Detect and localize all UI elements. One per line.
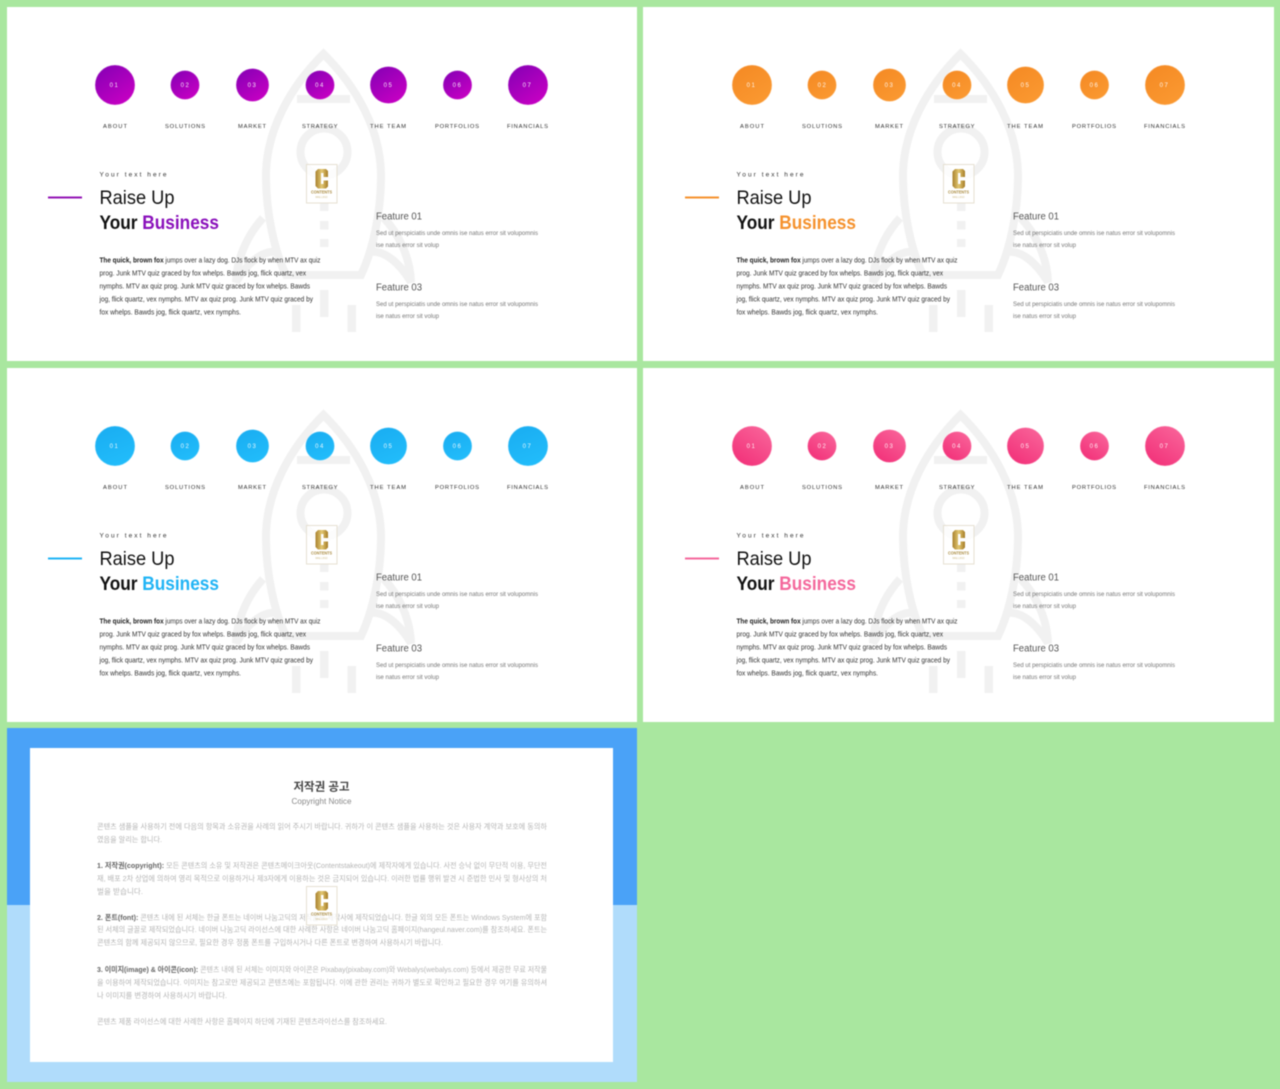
feature 01: [376, 572, 538, 610]
logo: contents: CONTENTS: [311, 912, 332, 916]
body text: nymphs. MTV ax quiz prog. Junk MTV quiz graced by fox whelps. Bawds: [100, 642, 310, 652]
icon: rocket outline: [236, 54, 411, 332]
notice section 2: 2. 폰트(font): 콘텐츠 내에 된 서체는 한글 폰트는 네이버 나눔고딕의 저작물로 제작사에 제작되었습니다. 한글 외의 모든 폰트는 Windows System에 포함: [97, 912, 547, 922]
navigation labels: [740, 124, 1185, 130]
logo: contents: [306, 886, 337, 925]
numbered circles: 07: [523, 83, 532, 89]
feature 03: ise natus error sit volup: [376, 314, 440, 320]
numbered circles: 07: [1160, 444, 1169, 450]
panel: copyright notice: [7, 728, 637, 1082]
navigation labels: ABOUT: [740, 485, 764, 491]
feature 01: ise natus error sit volup: [376, 604, 440, 610]
numbered circles: [95, 426, 548, 466]
numbered circles: 04: [952, 444, 962, 450]
feature 03: [1013, 282, 1175, 320]
feature 01: Feature 01: [1013, 572, 1059, 584]
notice section 1: 벌을 받습니다.: [97, 886, 143, 896]
title: Your Business: [100, 573, 219, 595]
heading accent line: [685, 558, 719, 560]
numbered circles: 03: [248, 444, 257, 450]
logo: contents: CONTENTS: [311, 550, 332, 556]
feature 01: ise natus error sit volup: [1013, 604, 1077, 610]
numbered circles: 06: [1090, 83, 1099, 89]
title: Your Business: [736, 573, 856, 595]
body text: nymphs. MTV ax quiz prog. Junk MTV quiz graced by fox whelps. Bawds: [736, 282, 947, 290]
panel: blue slide: [7, 368, 637, 722]
navigation labels: STRATEGY: [939, 124, 975, 130]
numbered circles: 02: [818, 444, 827, 450]
title: [736, 187, 856, 234]
notice title: [292, 780, 352, 806]
feature 03: Feature 03: [376, 644, 422, 654]
eyebrow text: Your text here: [100, 532, 167, 540]
navigation labels: ABOUT: [740, 124, 764, 130]
navigation labels: [103, 485, 548, 491]
logo: contents: CONTENTS: [948, 190, 969, 194]
numbered circles: 04: [315, 444, 325, 450]
notice intro: [97, 821, 547, 844]
feature 01: Feature 01: [1013, 212, 1059, 222]
body text: [736, 616, 958, 678]
body text: fox whelps. Bawds jog, flick quartz, vex nymphs.: [100, 668, 241, 678]
notice section 2: 콘텐츠의 함께 제공되지 않으므로, 필요한 경우 정품 폰트를 구입하시거나 다른 폰트로 변경하여 사용하시기 바랍니다.: [97, 937, 443, 947]
navigation labels: ABOUT: [103, 124, 127, 130]
body text: [99, 616, 321, 678]
navigation labels: MARKET: [875, 124, 903, 130]
numbered circles: 05: [1021, 444, 1030, 450]
navigation labels: MARKET: [238, 124, 266, 130]
feature 01: Feature 01: [376, 572, 422, 584]
navigation labels: FINANCIALS: [507, 124, 548, 130]
feature 03: Feature 03: [376, 282, 422, 294]
notice section 1: 재, 배포 2차 상업에 의하여 영리 목적으로 이용하거나 제3자에게 이용하는 것은 금지되어 있습니다. 이러한 법률 행위 발견 시 준법한 민사 및 형사상의 처: [97, 873, 547, 883]
body text: nymphs. MTV ax quiz prog. Junk MTV quiz graced by fox whelps. Bawds: [100, 282, 310, 290]
body text: prog. Junk MTV quiz graced by fox whelps. Bawds jog, flick quartz, vex: [100, 630, 306, 638]
numbered circles: 02: [181, 83, 190, 89]
body text: fox whelps. Bawds jog, flick quartz, vex nymphs.: [736, 668, 878, 678]
numbered circles: 03: [248, 83, 257, 89]
numbered circles: 04: [952, 83, 962, 89]
notice intro: 콘텐츠 샘플을 사용하기 전에 다음의 항목과 소유권을 사례의 읽어 주시기 바랍니다. 귀하가 이 콘텐츠 샘플을 사용하는 것은 사용자 계약과 보호에 동의하: [97, 821, 547, 831]
body text: The quick, brown fox jumps over a lazy dog. DJs flock by when MTV ax quiz: [100, 256, 321, 264]
body text: [736, 256, 958, 316]
numbered circles: 05: [384, 444, 393, 450]
numbered circles: 02: [181, 444, 190, 450]
body text: The quick, brown fox jumps over a lazy dog. DJs flock by when MTV ax quiz: [100, 616, 321, 626]
logo: contents: MAIL LOGO: [316, 557, 328, 560]
body text: The quick, brown fox jumps over a lazy dog. DJs flock by when MTV ax quiz: [736, 616, 958, 626]
numbered circles: 03: [885, 83, 894, 89]
feature 03: Sed ut perspiciatis unde omnis ise natus error sit volupomnis: [1013, 663, 1175, 669]
navigation labels: STRATEGY: [939, 485, 975, 491]
numbered circles: 02: [818, 83, 827, 89]
heading accent line: [685, 196, 719, 198]
numbered circles: [95, 65, 548, 105]
title: Your Business: [100, 212, 219, 234]
body text: prog. Junk MTV quiz graced by fox whelps. Bawds jog, flick quartz, vex: [736, 630, 943, 638]
body text: fox whelps. Bawds jog, flick quartz, vex nymphs.: [736, 308, 878, 316]
notice section 2: 된 서체의 글꼴로 제작되었습니다. 네이버 나눔고딕 라이선스에 대한 사례한 사항은 네이버 나눔고딕 홈페이지(hangeul.naver.com)를 참조하세요. 폰트는: [97, 924, 547, 934]
numbered circles: 05: [384, 83, 393, 89]
navigation labels: SOLUTIONS: [802, 124, 842, 130]
navigation labels: PORTFOLIOS: [1072, 124, 1116, 130]
navigation labels: SOLUTIONS: [802, 485, 842, 491]
feature 03: [1013, 644, 1175, 681]
navigation labels: THE TEAM: [370, 124, 406, 130]
numbered circles: 06: [1090, 444, 1099, 450]
numbered circles: 01: [110, 444, 119, 450]
navigation labels: SOLUTIONS: [165, 124, 205, 130]
navigation labels: FINANCIALS: [1144, 485, 1185, 491]
notice section 3: 나 이미지를 변경하여 사용하시기 바랍니다.: [97, 990, 227, 1000]
notice section 1: 1. 저작권(copyright): 모든 콘텐츠의 소유 및 저작권은 콘텐츠메이크아웃(Contentstakeout)에 제작자에게 있습니다. 사전 승낙 없이 무단적 이용, 무단전: [97, 860, 547, 870]
navigation labels: PORTFOLIOS: [435, 485, 479, 491]
feature 03: Feature 03: [1013, 282, 1059, 294]
feature 03: Sed ut perspiciatis unde omnis ise natus error sit volupomnis: [376, 302, 538, 308]
body text: jog, flick quartz, vex nymphs. MTV ax quiz prog. Junk MTV quiz graced by: [736, 294, 950, 304]
body text: jog, flick quartz, vex nymphs. MTV ax quiz prog. Junk MTV quiz graced by: [99, 656, 313, 664]
logo: contents: MAIL LOGO: [952, 196, 965, 199]
logo: contents: [306, 164, 337, 203]
notice section 2: [97, 912, 547, 947]
navigation labels: PORTFOLIOS: [435, 124, 479, 130]
body text: jog, flick quartz, vex nymphs. MTV ax quiz prog. Junk MTV quiz graced by: [99, 294, 313, 304]
numbered circles: [732, 65, 1185, 105]
numbered circles: 06: [453, 444, 462, 450]
logo: contents: MAIL LOGO: [316, 196, 328, 199]
eyebrow text: Your text here: [736, 532, 804, 540]
logo: contents: [944, 526, 974, 564]
notice title: 저작권 공고: [293, 780, 350, 794]
notice section 1: [97, 860, 547, 896]
notice intro: 였음을 알리는 합니다.: [97, 834, 162, 844]
title: Raise Up: [736, 187, 812, 209]
body text: prog. Junk MTV quiz graced by fox whelps. Bawds jog, flick quartz, vex: [100, 268, 306, 278]
navigation labels: STRATEGY: [302, 485, 338, 491]
icon: rocket outline: [236, 415, 411, 693]
logo: contents: CONTENTS: [311, 190, 332, 194]
logo: contents: MAIL LOGO: [316, 918, 328, 921]
feature 03: Sed ut perspiciatis unde omnis ise natus error sit volupomnis: [1013, 302, 1175, 308]
body text: [99, 256, 321, 316]
notice closing line: 콘텐츠 제품 라이선스에 대한 사례한 사항은 홈페이지 하단에 기재된 콘텐츠라이선스를 참조하세요.: [97, 1016, 387, 1026]
numbered circles: 04: [315, 83, 325, 89]
feature 03: ise natus error sit volup: [1013, 314, 1077, 320]
navigation labels: THE TEAM: [370, 485, 406, 491]
notice section 3: 을 이용하여 제작되었습니다. 이미지는 참고로만 제공되고 콘텐츠에는 포함됩니다. 이에 관한 권리는 귀하가 별도로 확인하고 필요한 경우 여기를 유의하셔: [97, 977, 547, 987]
feature 03: ise natus error sit volup: [376, 675, 440, 681]
body text: nymphs. MTV ax quiz prog. Junk MTV quiz graced by fox whelps. Bawds: [736, 642, 947, 652]
notice title: Copyright Notice: [292, 796, 352, 806]
logo: contents: [306, 526, 337, 564]
feature 03: [376, 282, 538, 320]
title: [100, 187, 219, 234]
icon: rocket outline: [873, 54, 1048, 332]
body text: The quick, brown fox jumps over a lazy dog. DJs flock by when MTV ax quiz: [736, 256, 958, 264]
panel: orange slide: [643, 7, 1274, 361]
feature 01: [1013, 572, 1175, 610]
feature 01: Sed ut perspiciatis unde omnis ise natus error sit volupomnis: [376, 592, 538, 598]
title: [736, 548, 856, 595]
title: Raise Up: [100, 548, 175, 570]
heading accent line: [48, 558, 82, 560]
navigation labels: MARKET: [875, 485, 903, 491]
panel: pink slide: [643, 368, 1274, 722]
numbered circles: 07: [523, 444, 532, 450]
numbered circles: 01: [747, 83, 756, 89]
logo: contents: [944, 164, 974, 203]
title: [100, 548, 219, 595]
feature 03: Feature 03: [1013, 644, 1059, 654]
numbered circles: 01: [110, 83, 119, 89]
feature 01: Sed ut perspiciatis unde omnis ise natus error sit volupomnis: [1013, 231, 1175, 237]
feature 01: [376, 212, 538, 249]
navigation labels: THE TEAM: [1007, 124, 1043, 130]
numbered circles: 03: [885, 444, 894, 450]
icon: rocket outline: [873, 415, 1048, 693]
feature 03: ise natus error sit volup: [1013, 675, 1077, 681]
title: Raise Up: [736, 548, 812, 570]
navigation labels: ABOUT: [103, 485, 127, 491]
logo: contents: CONTENTS: [948, 550, 969, 556]
eyebrow text: Your text here: [100, 172, 167, 178]
numbered circles: 06: [453, 83, 462, 89]
heading accent line: [48, 196, 82, 198]
feature 01: Sed ut perspiciatis unde omnis ise natus error sit volupomnis: [1013, 592, 1175, 598]
navigation labels: STRATEGY: [302, 124, 338, 130]
feature 01: [1013, 212, 1175, 249]
feature 01: ise natus error sit volup: [376, 243, 440, 249]
body text: jog, flick quartz, vex nymphs. MTV ax quiz prog. Junk MTV quiz graced by: [736, 656, 950, 664]
notice section 3: [97, 964, 547, 1000]
numbered circles: [732, 426, 1185, 466]
numbered circles: 07: [1160, 83, 1169, 89]
notice section 3: 3. 이미지(image) & 아이콘(icon): 콘텐츠 내에 된 서체는 이미지와 아이콘은 Pixabay(pixabay.com)와 Webalys(webalys.com) 등에서 제공한 무료 저작물: [97, 964, 547, 974]
title: Your Business: [736, 212, 856, 234]
feature 03: [376, 644, 538, 681]
navigation labels: THE TEAM: [1007, 485, 1043, 491]
feature 03: Sed ut perspiciatis unde omnis ise natus error sit volupomnis: [376, 663, 538, 669]
navigation labels: PORTFOLIOS: [1072, 485, 1116, 491]
navigation labels: SOLUTIONS: [165, 485, 205, 491]
title: Raise Up: [100, 187, 175, 209]
navigation labels: MARKET: [238, 485, 266, 491]
feature 01: Feature 01: [376, 212, 422, 222]
navigation labels: [103, 124, 548, 130]
numbered circles: 01: [747, 444, 756, 450]
panel: purple slide: [7, 7, 637, 361]
navigation labels: FINANCIALS: [507, 485, 548, 491]
body text: prog. Junk MTV quiz graced by fox whelps. Bawds jog, flick quartz, vex: [736, 268, 943, 278]
logo: contents: MAIL LOGO: [952, 557, 965, 560]
navigation labels: [740, 485, 1185, 491]
body text: fox whelps. Bawds jog, flick quartz, vex nymphs.: [100, 308, 241, 316]
feature 01: ise natus error sit volup: [1013, 243, 1077, 249]
numbered circles: 05: [1021, 83, 1030, 89]
navigation labels: FINANCIALS: [1144, 124, 1185, 130]
feature 01: Sed ut perspiciatis unde omnis ise natus error sit volupomnis: [376, 231, 538, 237]
eyebrow text: Your text here: [736, 172, 804, 178]
